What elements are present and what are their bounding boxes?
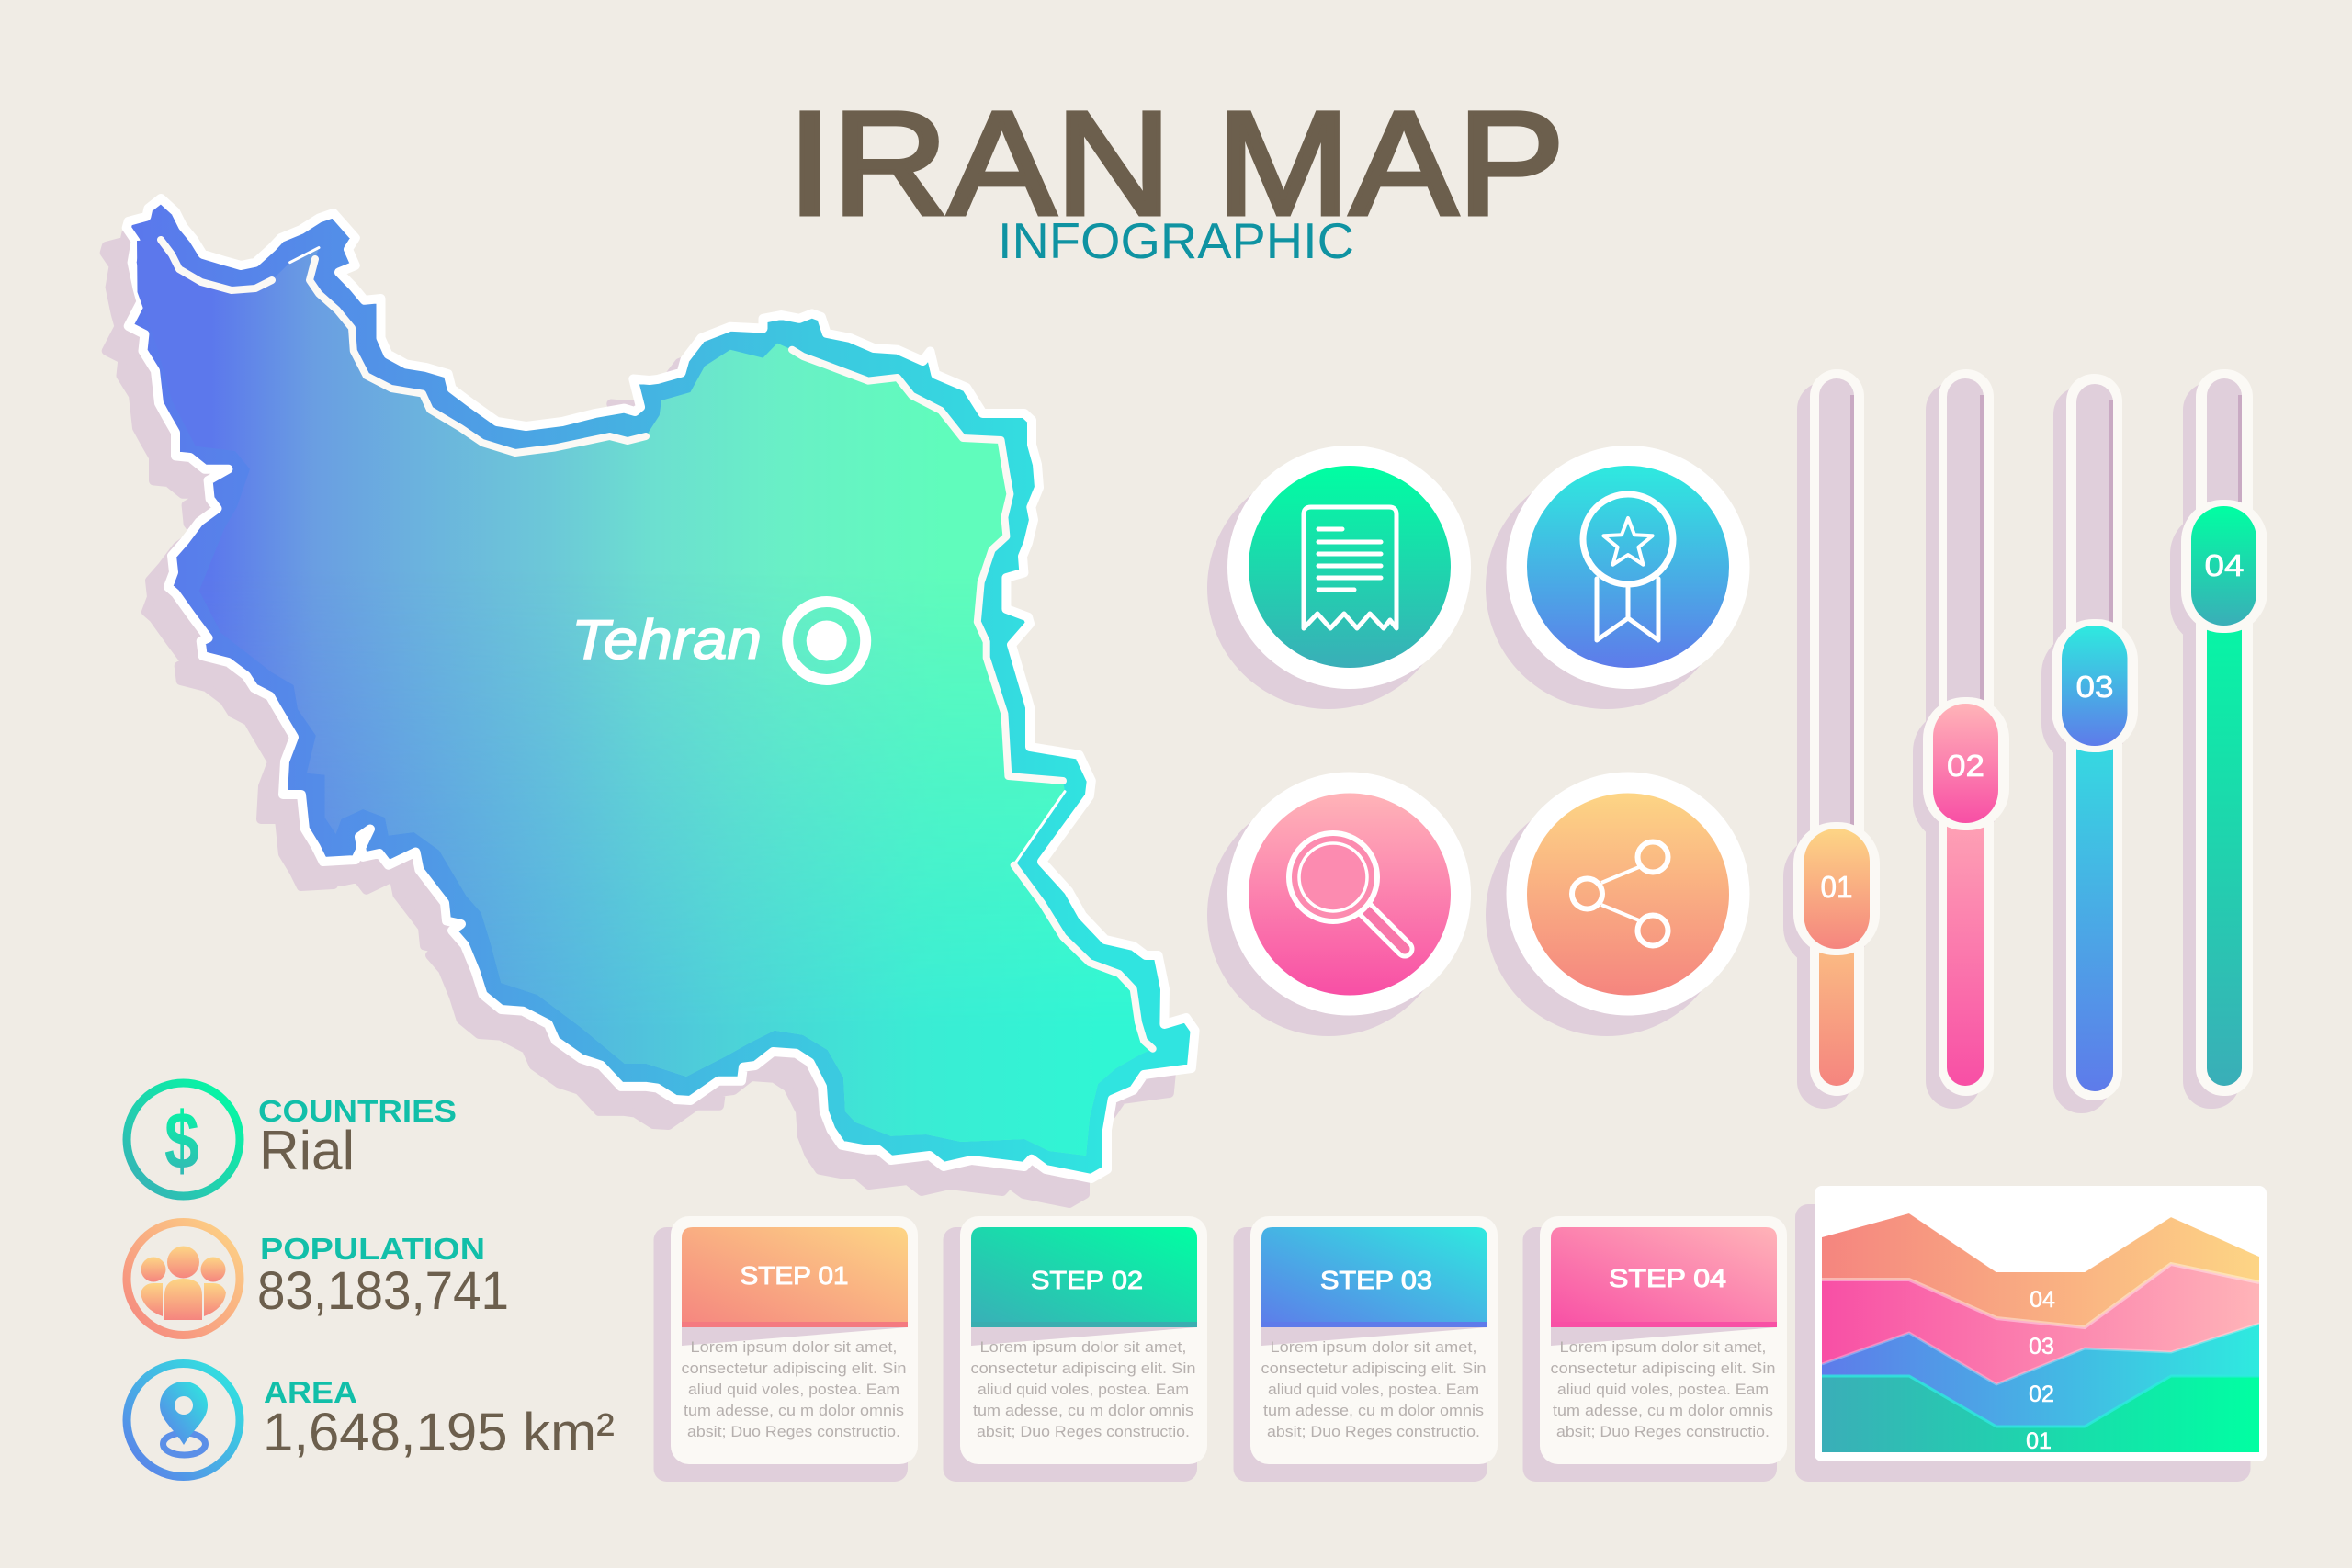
map band and outer white border: [127, 198, 1195, 1179]
step 01 body text: [682, 1338, 906, 1440]
step 02 body text: consectetur adipiscing elit. Sin: [970, 1359, 1196, 1377]
icon: medal: [1583, 494, 1673, 640]
step 04 body text: consectetur adipiscing elit. Sin: [1551, 1359, 1775, 1377]
step 02 body text: aliud quid voles, postea. Eam: [978, 1381, 1189, 1398]
step 03 body text: consectetur adipiscing elit. Sin: [1261, 1359, 1487, 1377]
map of Iran: [105, 198, 1195, 1203]
title: IRAN MAP: IRAN MAP: [787, 81, 1565, 245]
step 01 body text: consectetur adipiscing elit. Sin: [682, 1359, 906, 1377]
chart layer 02: [1822, 1324, 2259, 1452]
chart layer 01: [1822, 1376, 2259, 1452]
step 01 body text: tum adesse, cu m dolor omnis: [684, 1402, 904, 1419]
slider 02: 02: [1947, 749, 1984, 783]
chart labels: 04: [2030, 1287, 2055, 1313]
currency value: Rial: [259, 1120, 355, 1181]
step 03 body text: aliud quid voles, postea. Eam: [1268, 1381, 1479, 1398]
step 04 body text: [1551, 1338, 1775, 1440]
icon: receipt: [1304, 507, 1396, 628]
slider 03: 03: [2076, 670, 2113, 704]
map inner white lines: [161, 240, 1153, 1049]
panel: step 02 card: [943, 1216, 1207, 1482]
area label: AREA: [264, 1375, 357, 1409]
area chart: [1795, 1186, 2267, 1482]
subtitle: INFOGRAPHIC: INFOGRAPHIC: [998, 212, 1354, 269]
stat: area: [127, 1363, 615, 1477]
step 03 body text: absit; Duo Reges constructio.: [1267, 1423, 1480, 1440]
icon: magnifying glass: [1289, 833, 1405, 949]
step 02 body text: tum adesse, cu m dolor omnis: [973, 1402, 1193, 1419]
step 02 heading: STEP 02: [1031, 1266, 1143, 1294]
Tehran label: Tehran: [571, 609, 762, 671]
map land fill: [137, 240, 1153, 1156]
stat: population: [127, 1222, 509, 1336]
icon: location ring: [127, 1363, 240, 1477]
step 03 body text: tum adesse, cu m dolor omnis: [1263, 1402, 1484, 1419]
slider 02: [1913, 369, 2009, 1109]
icon: dollar ring: [127, 1083, 240, 1196]
step 04 heading: STEP 04: [1609, 1264, 1726, 1292]
step 04 body text: absit; Duo Reges constructio.: [1556, 1423, 1770, 1440]
chart labels: 03: [2029, 1334, 2054, 1359]
panel: step 04 card: [1523, 1216, 1787, 1482]
currency label: COUNTRIES: [258, 1094, 457, 1128]
chart labels: 01: [2026, 1428, 2052, 1454]
chart layer 03: [1822, 1264, 2259, 1452]
step 04 body text: aliud quid voles, postea. Eam: [1557, 1381, 1769, 1398]
icon: Tehran marker: [787, 602, 865, 680]
icon: people ring: [127, 1222, 240, 1336]
step 04 body text: tum adesse, cu m dolor omnis: [1553, 1402, 1773, 1419]
map shadow: [105, 223, 1173, 1203]
step 02 body text: Lorem ipsum dolor sit amet,: [979, 1338, 1187, 1356]
panel: step 01 card: [654, 1216, 918, 1482]
stat: currency: [127, 1083, 457, 1196]
step 01 body text: absit; Duo Reges constructio.: [687, 1423, 900, 1440]
step 03 heading: STEP 03: [1320, 1266, 1432, 1294]
panel: share icon badge: [1486, 772, 1749, 1036]
icon: share nodes: [1572, 841, 1668, 946]
step 02 body text: absit; Duo Reges constructio.: [977, 1423, 1190, 1440]
step 02 body text: [970, 1338, 1196, 1440]
panel: search icon badge: [1207, 772, 1471, 1036]
panel: award icon badge: [1486, 446, 1749, 709]
chart layer 04: [1822, 1212, 2259, 1452]
panel: step 03 card: [1233, 1216, 1498, 1482]
slider 04: 04: [2205, 548, 2244, 582]
step 01 body text: Lorem ipsum dolor sit amet,: [691, 1338, 897, 1356]
slider 04: [2170, 369, 2267, 1109]
step 01 body text: aliud quid voles, postea. Eam: [688, 1381, 899, 1398]
chart labels: 02: [2029, 1382, 2054, 1407]
slider 01: [1783, 369, 1880, 1109]
slider 03: [2041, 374, 2138, 1113]
step 03 body text: Lorem ipsum dolor sit amet,: [1270, 1338, 1477, 1356]
slider 01: 01: [1821, 870, 1852, 904]
step 04 body text: Lorem ipsum dolor sit amet,: [1560, 1338, 1766, 1356]
step 01 heading: STEP 01: [741, 1261, 849, 1290]
panel: receipt icon badge: [1207, 446, 1471, 709]
chart labels: [2026, 1287, 2055, 1454]
icon: dollar ring: $: [164, 1095, 199, 1186]
population label: POPULATION: [260, 1232, 485, 1266]
step 03 body text: [1261, 1338, 1487, 1440]
population value: 83,183,741: [257, 1261, 509, 1321]
area value: 1,648,195 km²: [263, 1403, 615, 1462]
